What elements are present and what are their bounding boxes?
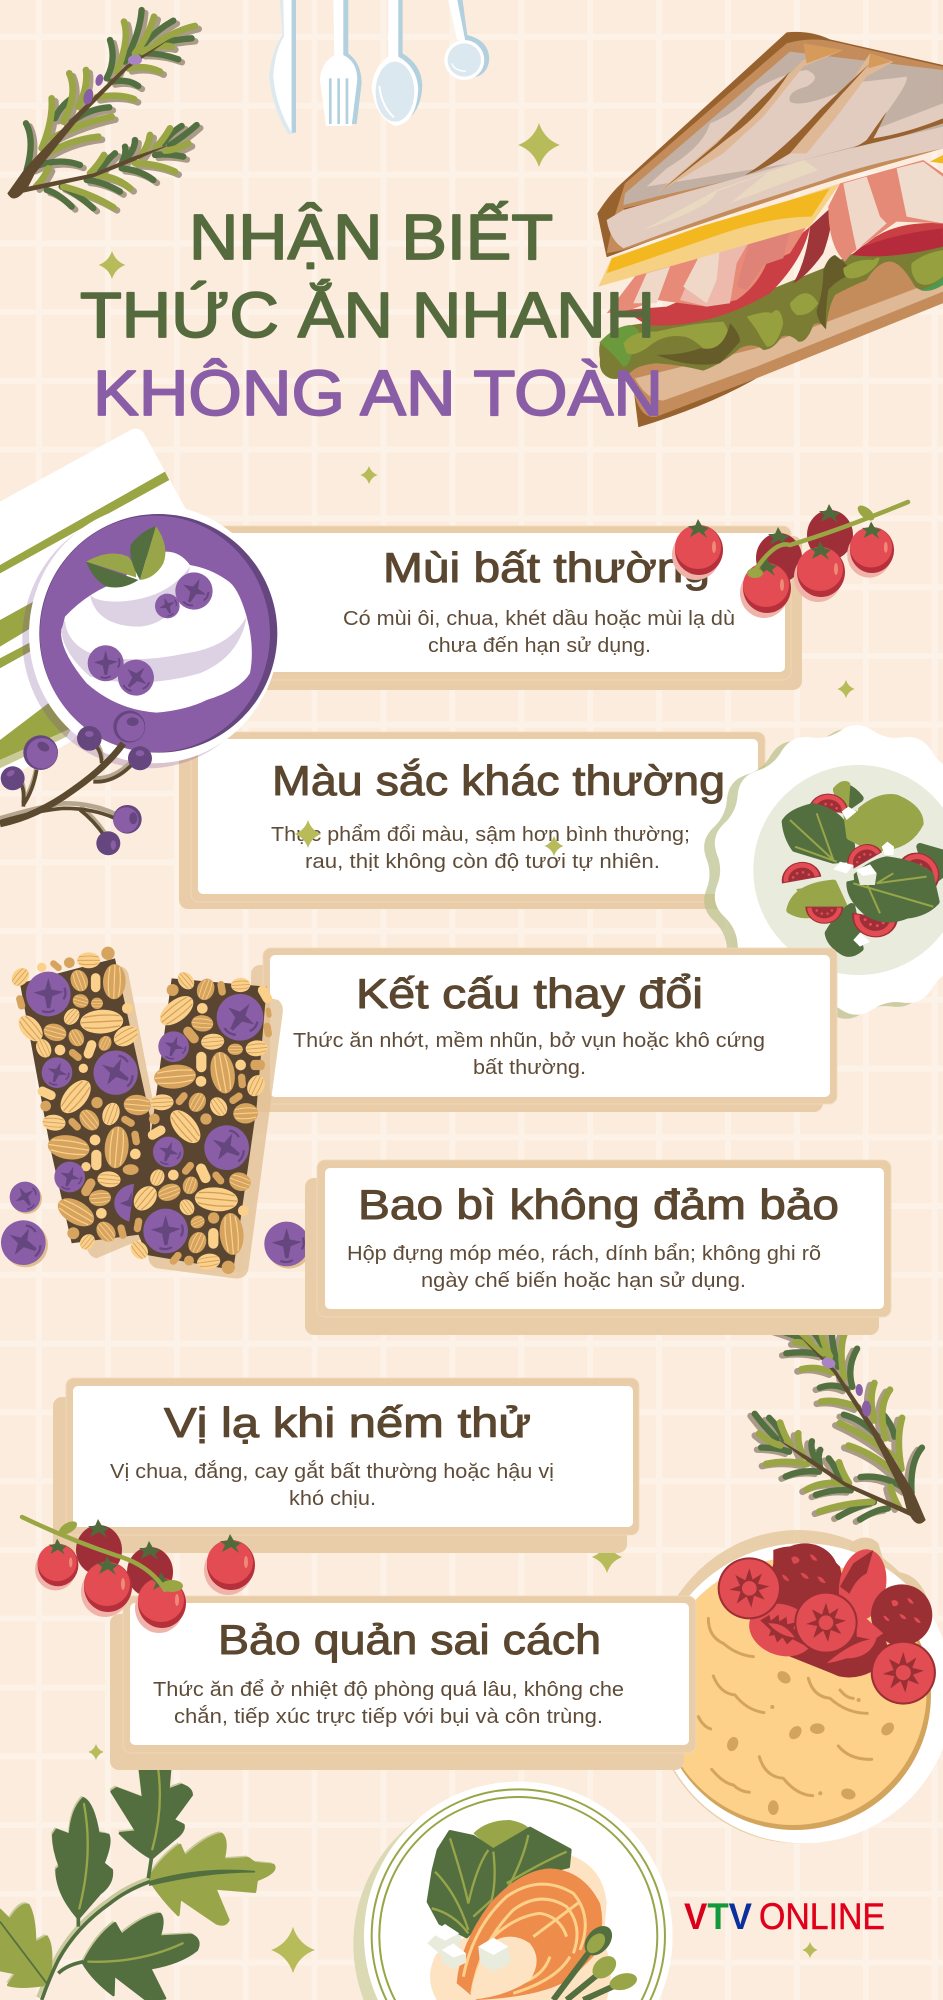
bar bodies [20, 958, 150, 1243]
heading: Mùi bất thường [383, 544, 710, 591]
lettuce [428, 1820, 570, 1937]
sparkles lower [88, 1744, 818, 1973]
lettuce [599, 240, 943, 379]
body text: rau, thịt không còn độ tươi tự nhiên. [305, 851, 660, 873]
feta cubes [427, 1924, 511, 1972]
leaf highlights [0, 1767, 272, 1997]
bottom bread [623, 233, 943, 427]
illustration: bowl of blueberry yogurt [22, 505, 279, 768]
card 4: Bao bì không đảm bảo [305, 1160, 891, 1335]
illustration: oak leaf herb bottom left [0, 1767, 274, 2000]
body text: chưa đến hạn sử dụng. [428, 635, 651, 657]
sparkle under card 5 [592, 1541, 622, 1573]
body text: Thức ăn để ở nhiệt độ phòng quá lâu, không che [153, 1679, 624, 1701]
body text: Hộp đựng móp méo, rách, dính bẩn; không ghi rõ [347, 1243, 821, 1265]
yogurt [61, 552, 252, 713]
illustration: tomatoes on card 1 [672, 502, 908, 618]
title line 2: THỨC ẮN NHANH [80, 278, 655, 351]
title line 3: KHÔNG AN TOÀN [93, 357, 663, 429]
heading: Màu sắc khác thường [272, 757, 725, 804]
blueberries on bars [26, 972, 272, 1253]
salad leaves [779, 785, 943, 953]
top bread [597, 32, 943, 257]
logo: VTV Online: VTV [684, 1896, 752, 1937]
heading: Vị lạ khi nếm thử [164, 1399, 531, 1446]
illustration: rosemary sprig top left [7, 10, 200, 211]
illustration: salmon plate [353, 1782, 673, 2000]
logo: VTV Online: ONLINE [759, 1896, 885, 1937]
feta cubes [833, 807, 894, 947]
body text [110, 1460, 554, 1510]
cheese [598, 155, 943, 287]
strawberries [718, 1543, 936, 1705]
illustration: cutlery [269, 0, 489, 134]
illustration: granola bars [0, 947, 311, 1279]
illustration: salad plate [704, 725, 943, 1019]
cream [430, 1855, 611, 2000]
berries [1, 711, 152, 855]
body text: Thức ăn nhớt, mềm nhũn, bở vụn hoặc khô cứng [293, 1030, 765, 1052]
illustration: berry branch [0, 711, 152, 855]
heading: Bao bì không đảm bảo [358, 1181, 839, 1228]
oat flakes [725, 1669, 897, 1815]
logo: VTV Online [684, 1896, 885, 1937]
tomato [623, 208, 943, 326]
icon: spoon [372, 0, 422, 126]
sparkles upper [99, 123, 855, 698]
illustration: sandwich [597, 32, 943, 427]
card 1: Mùi bất thường [217, 526, 802, 690]
oats and grains [8, 952, 268, 1271]
card 5: Vị lạ khi nếm thử [53, 1378, 639, 1553]
icon: knife [269, 0, 296, 134]
icon: fork [320, 0, 362, 126]
bar shadows [87, 966, 283, 1279]
sparkles over card 2 [295, 820, 564, 856]
card 3: Kết cấu thay đổi [251, 948, 837, 1112]
asparagus [553, 1921, 639, 2000]
body text: Vị chua, đắng, cay gắt bất thường hoặc hậu vị [110, 1460, 554, 1483]
body text: chắn, tiếp xúc trực tiếp với bụi và côn trùng. [174, 1705, 603, 1728]
illustration: napkin [0, 429, 207, 783]
salmon [457, 1868, 602, 2000]
title [80, 201, 663, 429]
body text [153, 1679, 624, 1728]
body text: bất thường. [473, 1057, 586, 1079]
body text [293, 1030, 765, 1079]
illustration: tomatoes near card 6 [22, 1517, 255, 1633]
bacon [607, 160, 943, 313]
porridge swirls [698, 1618, 872, 1796]
blueberries [88, 566, 219, 703]
leaves [0, 1770, 274, 2000]
card 6: Bảo quản sai cách [110, 1596, 696, 1770]
card 2: Màu sắc khác thường [179, 732, 765, 909]
body text [347, 1243, 821, 1292]
heading: Bảo quản sai cách [218, 1616, 601, 1663]
loose blueberries [0, 1176, 311, 1273]
small grains [15, 947, 274, 1274]
body text: Thực phẩm đổi màu, sậm hơn bình thường; [271, 824, 690, 846]
mint leaves [86, 526, 165, 587]
title line 1: NHẬN BIẾT [189, 201, 553, 273]
heading: Kết cấu thay đổi [356, 970, 703, 1017]
illustration: rosemary sprig right [733, 1301, 943, 1538]
body text: Có mùi ôi, chua, khét dầu hoặc mùi lạ dù [343, 608, 735, 630]
illustration: oatmeal bowl with strawberries [650, 1530, 943, 1843]
body text: khó chịu. [289, 1488, 376, 1510]
body text [343, 608, 735, 657]
body text [271, 824, 690, 873]
icon: tea spoon [444, 0, 489, 80]
body text: ngày chế biến hoặc hạn sử dụng. [421, 1270, 746, 1292]
